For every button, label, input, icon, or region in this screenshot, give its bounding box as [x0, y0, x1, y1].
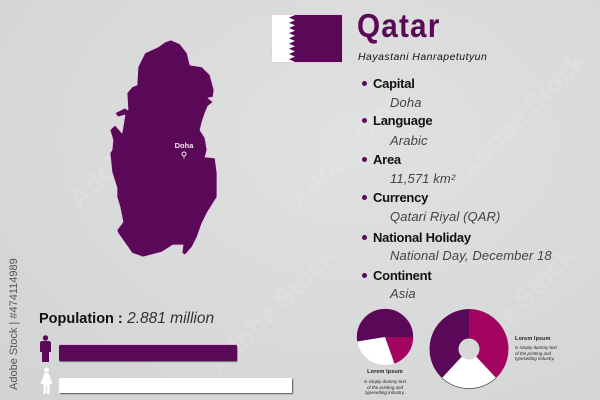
bullet: Capital — [362, 81, 367, 86]
bullet: Area — [362, 157, 367, 162]
large donut chart — [430, 309, 508, 389]
icon: location pin — [182, 152, 186, 158]
caption heading: Lorem Ipsum — [367, 369, 403, 375]
text: Adobe Stock — [283, 76, 421, 214]
large donut caption — [515, 336, 557, 361]
side credit text: Adobe Stock | #474114989 — [8, 258, 20, 390]
bullet: Language — [362, 118, 367, 123]
value: Language: Arabic — [390, 133, 428, 148]
small pie caption — [364, 369, 406, 395]
caption body: is simply dummy text — [364, 379, 406, 384]
flag of Qatar — [271, 14, 343, 63]
value: National Holiday: National Day, December 18 — [390, 248, 552, 263]
label: Currency: Currency — [373, 190, 428, 205]
facts list — [362, 76, 552, 301]
city label: Doha: Doha — [175, 141, 194, 150]
label: Capital: Capital — [373, 76, 415, 91]
label: Area: Area — [373, 152, 401, 167]
label: National Holiday: National Holiday — [373, 230, 471, 245]
small pie chart — [356, 308, 414, 366]
label: Language: Language — [373, 113, 432, 128]
bullet: National Holiday — [362, 235, 367, 240]
text: Adobe Stock — [443, 241, 581, 379]
caption body: of the printing and — [367, 384, 403, 390]
value: Capital: Doha — [390, 95, 422, 110]
value: Continent: Asia — [390, 286, 416, 301]
caption body — [364, 379, 406, 395]
text: Adobe Stock — [453, 46, 591, 184]
value: Currency: Qatari Riyal (QAR) — [390, 209, 501, 224]
value: Area: 11,571 km² — [390, 171, 455, 186]
icon: female figure — [40, 368, 52, 394]
caption body: is simply dummy text — [515, 345, 557, 350]
icon: male figure — [40, 335, 51, 362]
map of Qatar with Doha marker — [110, 40, 218, 258]
title: Qatar — [357, 7, 440, 44]
population heading: Population : 2.881 million — [39, 310, 214, 327]
bar: male population — [59, 345, 237, 361]
bar: female population — [59, 378, 292, 393]
text: Adobe Stock — [63, 76, 201, 214]
text: Adobe Stock — [203, 241, 341, 379]
bullet: Continent — [362, 273, 367, 278]
bullet: Currency — [362, 195, 367, 200]
caption body: typesetting industry. — [365, 390, 405, 395]
caption body: typesetting industry. — [515, 356, 555, 361]
caption body: of the printing and — [515, 350, 551, 356]
subtitle: Hayastani Hanrapetutyun — [358, 51, 487, 63]
caption body — [515, 345, 557, 361]
caption heading: Lorem Ipsum — [515, 336, 551, 342]
label: Continent: Continent — [373, 268, 431, 283]
